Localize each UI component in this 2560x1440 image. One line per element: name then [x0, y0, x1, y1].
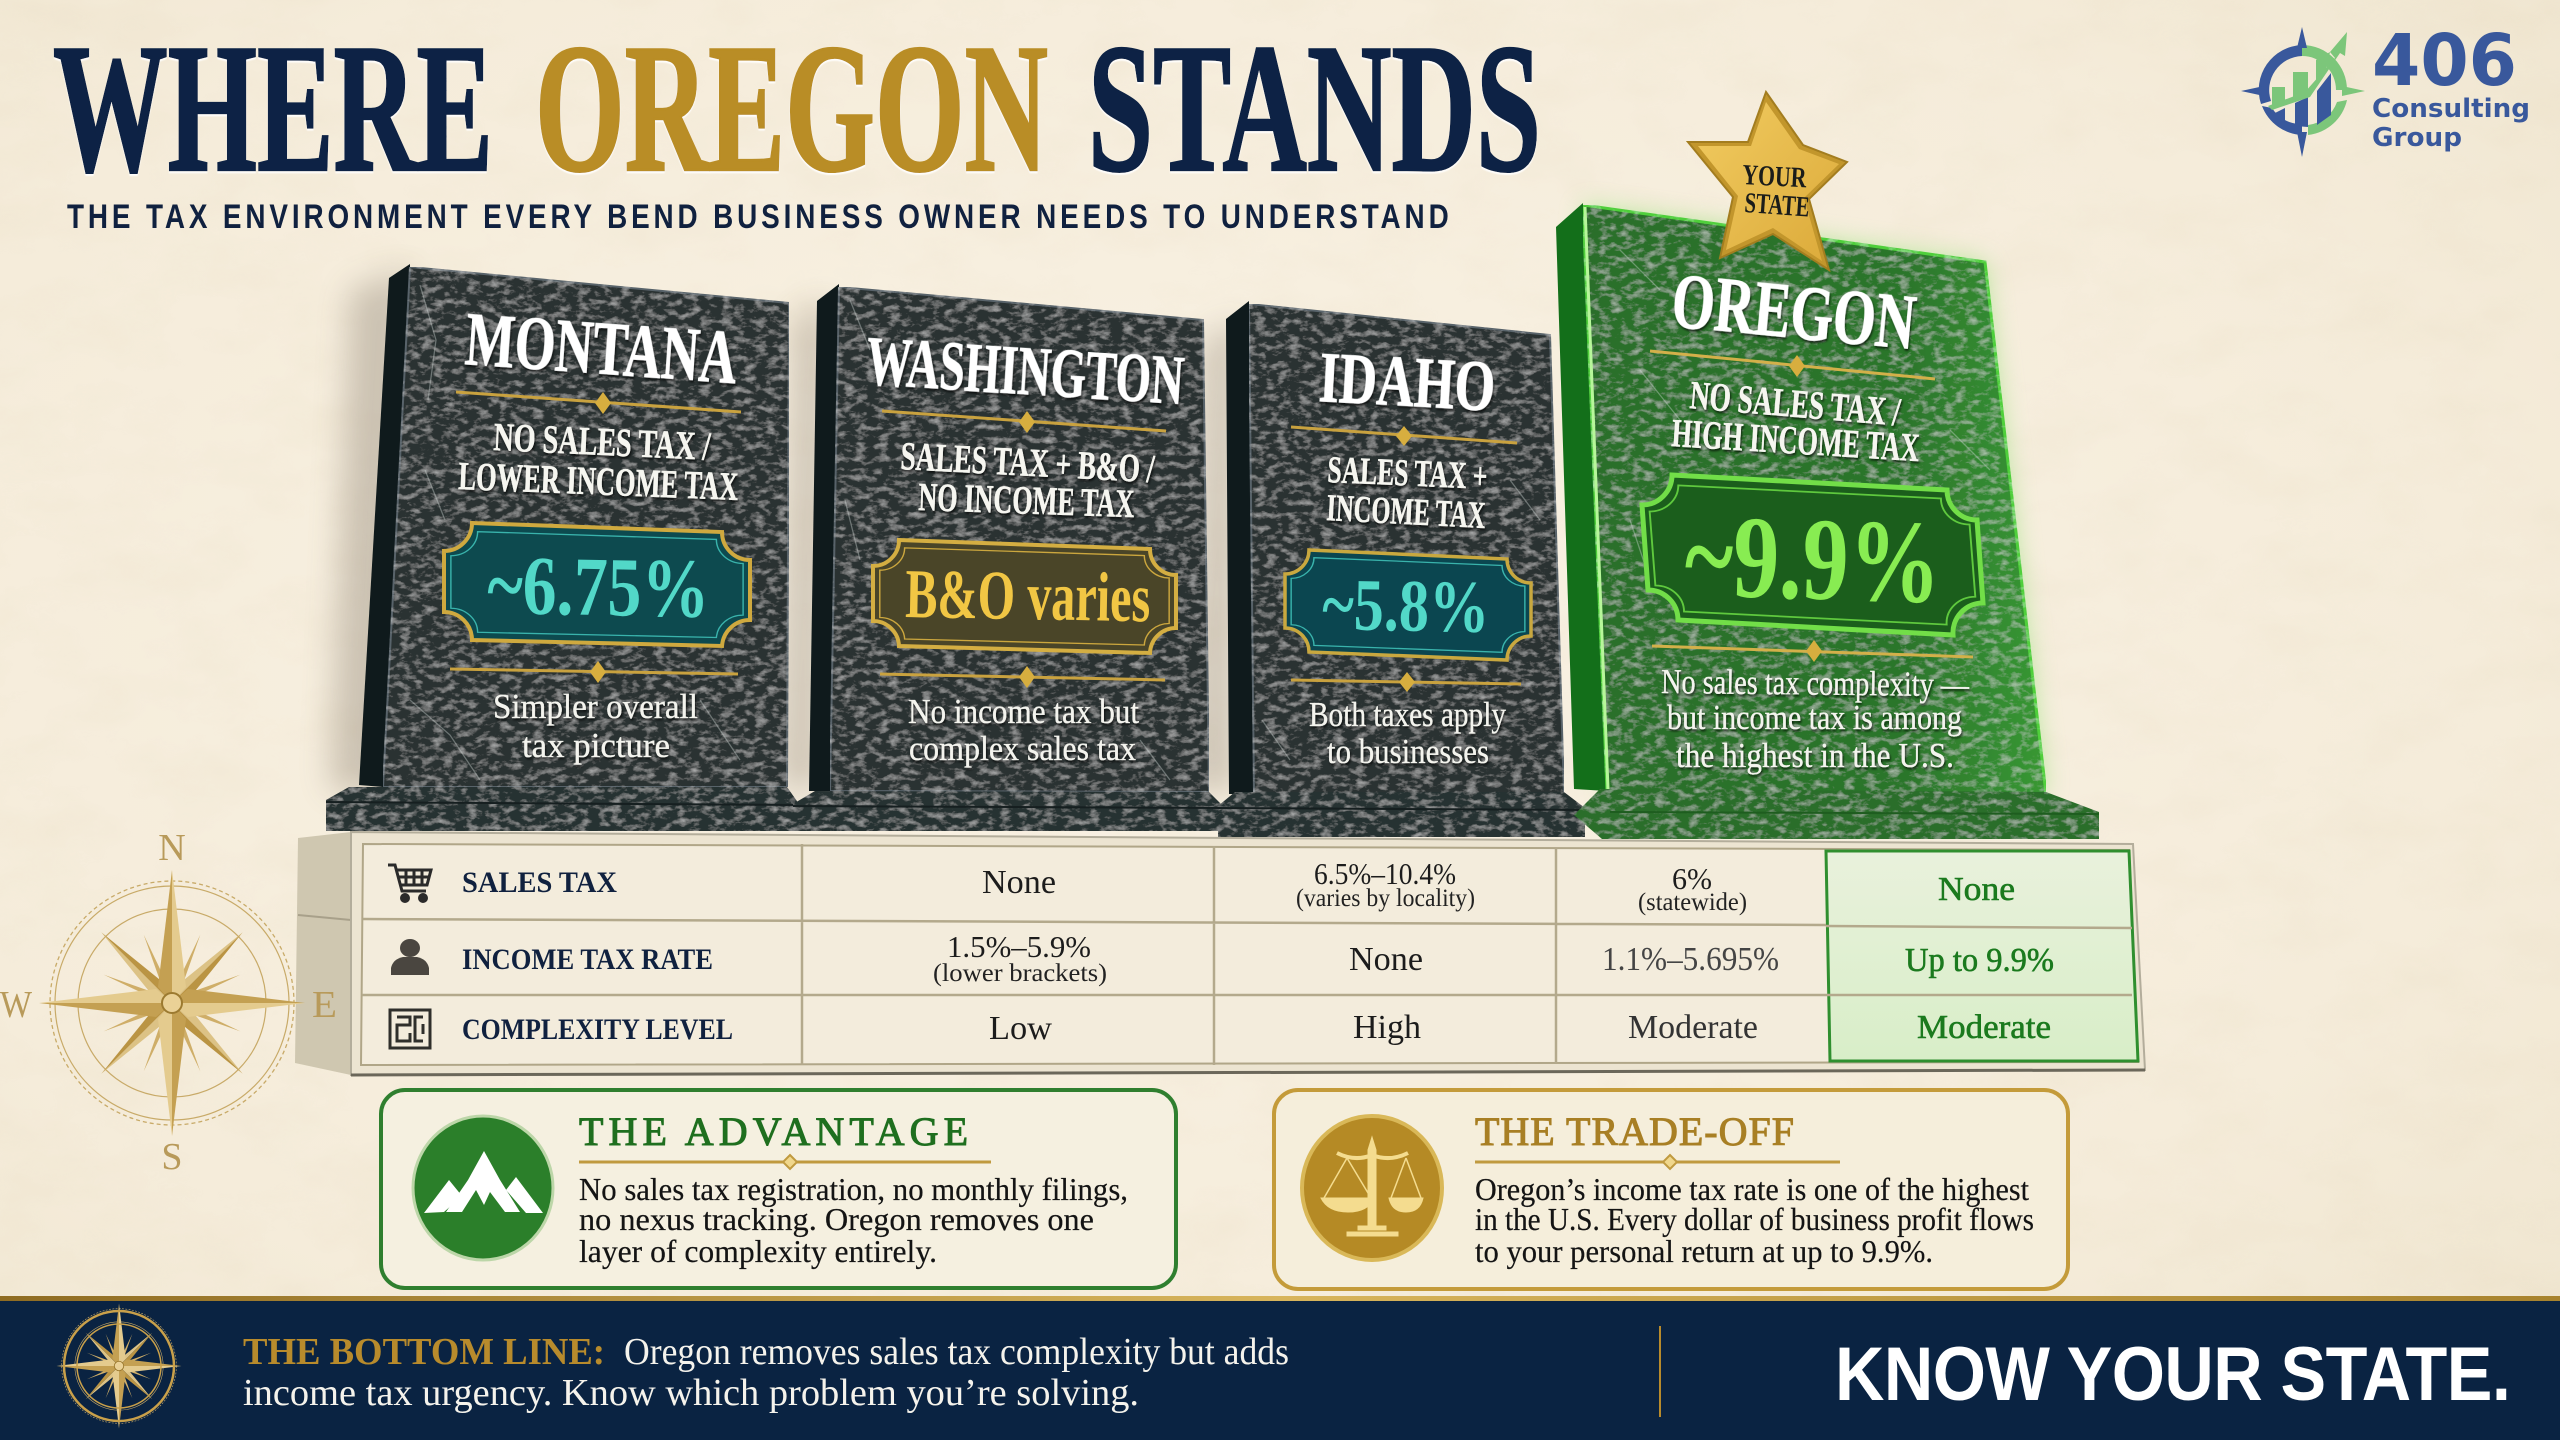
- Washington description: No income tax but: [908, 692, 1139, 731]
- icon: Your State gold star: [1688, 92, 1847, 270]
- bottom line text: THE BOTTOM LINE:: [243, 1331, 605, 1373]
- title: OREGON: [535, 6, 1048, 210]
- row: income tax rate: [391, 929, 2054, 987]
- Washington lower divider: [880, 666, 1165, 688]
- icon: person: [391, 939, 429, 975]
- panel: Montana slab: [326, 264, 799, 831]
- row: sales tax: (statewide): [1638, 889, 1747, 916]
- row: income tax rate: 1.1%–5.695%: [1602, 941, 1779, 978]
- row: income tax rate: Up to 9.9%: [1905, 942, 2054, 979]
- Oregon rate badge: ~9.9%: [1683, 490, 1943, 628]
- Idaho description: Both taxes apply: [1309, 695, 1506, 734]
- Montana tax summary: LOWER INCOME TAX: [458, 453, 739, 509]
- Montana description: tax picture: [522, 726, 670, 765]
- Montana heading: MONTANA: [463, 297, 740, 400]
- icon: shopping cart: [388, 865, 431, 902]
- row: sales tax: (varies by locality): [1296, 885, 1475, 912]
- Montana rate badge: ~6.75%: [487, 539, 710, 636]
- row: sales tax: None: [982, 864, 1056, 901]
- bottom line text: [243, 1331, 1289, 1414]
- Idaho tax summary: INCOME TAX: [1326, 487, 1486, 537]
- Idaho rate badge: [1285, 550, 1531, 660]
- icon: compass rose: N: [158, 827, 186, 869]
- row: complexity level: Moderate: [1917, 1009, 2051, 1046]
- trade-off body text: in the U.S. Every dollar of business profit flows: [1475, 1201, 2034, 1237]
- logo: 406 Consulting Group: 406: [2372, 19, 2517, 102]
- logo: 406 Consulting Group: [2241, 19, 2530, 157]
- Oregon heading: OREGON: [1668, 256, 1920, 366]
- Idaho heading: IDAHO: [1317, 337, 1497, 427]
- advantage body text: [579, 1171, 1128, 1269]
- row: complexity level: Low: [989, 1010, 1052, 1047]
- row: income tax rate: None: [1349, 941, 1423, 978]
- Idaho tax summary: [1326, 449, 1488, 537]
- logo: 406 Consulting Group: Consulting: [2372, 94, 2530, 124]
- Idaho description: [1309, 695, 1506, 771]
- decorative wall shadows: [330, 270, 1240, 790]
- panel: Washington slab: [793, 284, 1223, 831]
- Idaho lower divider: [1291, 672, 1521, 692]
- icon: gold scales badge: [1302, 1116, 1442, 1260]
- Oregon description: No sales tax complexity —: [1661, 662, 1970, 704]
- panel: bottom line footer: [0, 1296, 2560, 1440]
- advantage heading: THE ADVANTAGE: [579, 1109, 968, 1154]
- Washington B&O badge: B&O varies: [905, 556, 1151, 637]
- icon: compass rose: [0, 827, 337, 1178]
- title: WHERE: [53, 6, 493, 210]
- Oregon description: the highest in the U.S.: [1676, 736, 1954, 775]
- row: sales tax: [388, 856, 2015, 916]
- Montana divider: [456, 392, 741, 414]
- Idaho description: to businesses: [1327, 732, 1489, 771]
- row: income tax rate: 1.5%–5.9%: [947, 929, 1091, 964]
- Montana rate badge: [444, 523, 750, 646]
- bottom line text: Oregon removes sales tax complexity but adds: [624, 1331, 1289, 1373]
- title: [53, 6, 1541, 210]
- Washington tax summary: SALES TAX + B&O /: [900, 433, 1156, 491]
- trade-off body text: to your personal return at up to 9.9%.: [1475, 1233, 1933, 1269]
- Montana tax summary: [458, 414, 739, 509]
- icon: maze: [390, 1010, 430, 1048]
- Oregon tax summary: [1670, 372, 1921, 470]
- subtitle: THE TAX ENVIRONMENT EVERY BEND BUSINESS OWNER NEEDS TO UNDERSTAND: [67, 197, 1449, 236]
- advantage divider: [579, 1155, 991, 1169]
- row: complexity level: High: [1353, 1009, 1421, 1046]
- advantage body text: No sales tax registration, no monthly filings,: [579, 1171, 1128, 1207]
- Idaho tax summary: SALES TAX +: [1327, 449, 1488, 498]
- row: sales tax: 6.5%–10.4%: [1314, 856, 1456, 891]
- Montana lower divider: [450, 661, 738, 683]
- panel: Idaho slab: [1218, 301, 1585, 837]
- Oregon description: [1661, 662, 1970, 775]
- Idaho rate badge: ~5.8%: [1322, 564, 1490, 649]
- panel: the trade-off: [1274, 1090, 2068, 1289]
- Montana description: [493, 687, 698, 765]
- icon: compass rose: S: [161, 1136, 183, 1178]
- Oregon tax summary: NO SALES TAX /: [1688, 372, 1903, 435]
- panel: the advantage: [381, 1090, 1176, 1288]
- Washington divider: [882, 411, 1166, 433]
- row: complexity level: Moderate: [1628, 1009, 1758, 1046]
- Oregon description: but income tax is among: [1667, 698, 1962, 737]
- Washington description: complex sales tax: [909, 729, 1136, 768]
- trade-off heading: THE TRADE-OFF: [1475, 1109, 1794, 1154]
- row: sales tax: 6%: [1672, 861, 1712, 896]
- row: complexity level: [390, 1009, 2051, 1048]
- icon: Your State gold star: STATE: [1744, 187, 1811, 224]
- row: complexity level: COMPLEXITY LEVEL: [462, 1013, 733, 1046]
- row: income tax rate: INCOME TAX RATE: [462, 943, 713, 976]
- Montana tax summary: NO SALES TAX /: [493, 414, 712, 469]
- Idaho divider: [1291, 426, 1517, 446]
- advantage body text: no nexus tracking. Oregon removes one: [579, 1201, 1094, 1237]
- row: income tax rate: (lower brackets): [933, 960, 1107, 987]
- Washington B&O badge: [873, 540, 1176, 653]
- Washington tax summary: NO INCOME TAX: [918, 474, 1135, 526]
- bottom line text: income tax urgency. Know which problem you’re solving.: [243, 1372, 1139, 1414]
- Oregon divider: [1650, 351, 1935, 379]
- panel: Oregon slab: [1556, 203, 2099, 839]
- trade-off body text: Oregon’s income tax rate is one of the highest: [1475, 1171, 2029, 1207]
- row: sales tax: None: [1938, 871, 2015, 908]
- trade-off divider: [1475, 1155, 1840, 1169]
- Washington description: [908, 692, 1139, 768]
- icon: compass rose: E: [312, 984, 337, 1026]
- title: STANDS: [1088, 6, 1541, 210]
- panel: comparison table: [295, 832, 2145, 1075]
- advantage body text: layer of complexity entirely.: [579, 1233, 937, 1269]
- Montana description: Simpler overall: [493, 687, 698, 726]
- icon: footer compass: [56, 1303, 182, 1429]
- decorative green glow: [1583, 205, 2046, 794]
- icon: green mountain badge: [413, 1116, 553, 1260]
- trade-off body text: [1475, 1171, 2034, 1269]
- Oregon tax summary: HIGH INCOME TAX: [1670, 410, 1921, 470]
- know your state callout: KNOW YOUR STATE.: [1835, 1333, 2511, 1417]
- Washington tax summary: [900, 433, 1156, 526]
- icon: compass rose: W: [0, 984, 32, 1026]
- icon: Your State gold star: YOUR: [1742, 159, 1808, 194]
- logo: 406 Consulting Group: Group: [2372, 123, 2462, 153]
- Washington heading: WASHINGTON: [864, 323, 1186, 420]
- row: sales tax: SALES TAX: [462, 866, 617, 899]
- Oregon lower divider: [1652, 640, 1973, 662]
